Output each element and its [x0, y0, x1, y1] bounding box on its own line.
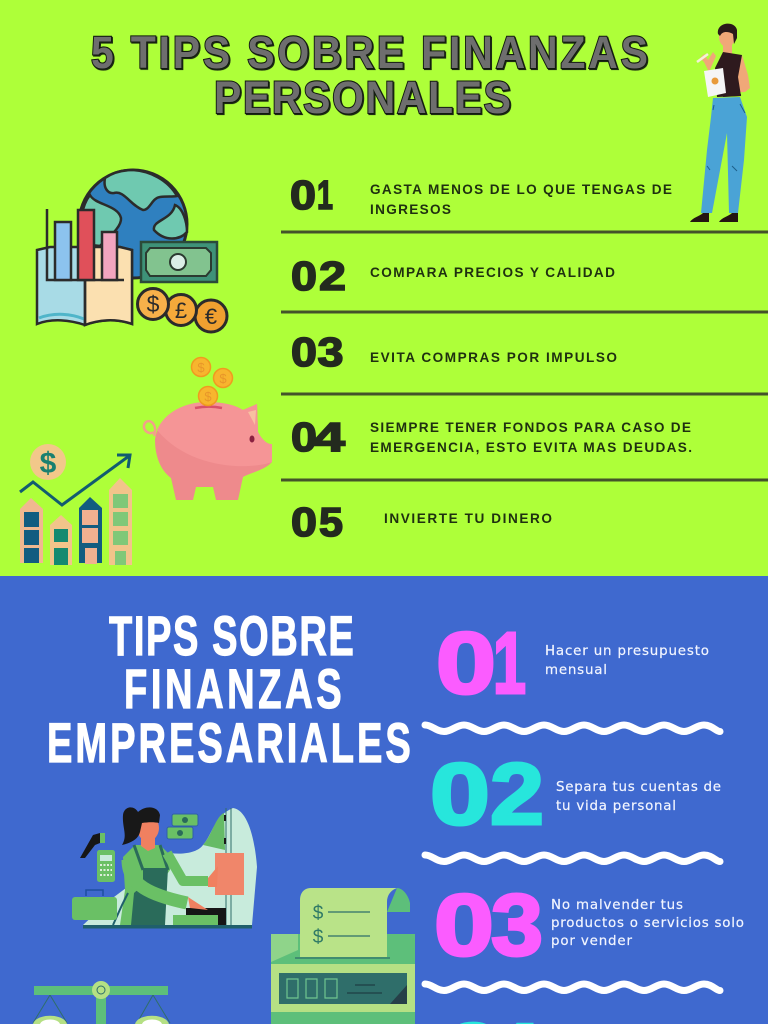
number 01: 0: [290, 172, 316, 218]
icon: rising buildings growth chart: [20, 444, 132, 565]
number 03: 3: [491, 877, 543, 974]
number 03: [434, 877, 543, 974]
icon: rising buildings growth chart: $: [40, 447, 57, 480]
title: business finance: [47, 606, 411, 775]
business tip 02: [430, 746, 721, 843]
number 01: 1: [493, 615, 526, 712]
number 01: [436, 615, 526, 712]
text 03: productos o servicios solo: [551, 916, 744, 931]
panel: personal finance background: [0, 0, 768, 576]
panel: business finance background: [0, 576, 768, 1024]
number 02: 0: [430, 746, 490, 843]
icon: piggy bank with coins: $: [204, 389, 212, 404]
text 02: COMPARA PRECIOS Y CALIDAD: [370, 265, 615, 280]
text 01: GASTA MENOS DE LO QUE TENGAS DE: [370, 182, 672, 197]
icon: piggy bank with coins: [144, 358, 272, 500]
icon: balance scale: [33, 981, 170, 1024]
tip row 04: [291, 414, 692, 460]
title: personal finance: 5 TIPS SOBRE FINANZAS: [91, 28, 648, 78]
text 04: EMERGENCIA, ESTO EVITA MAS DEUDAS.: [370, 440, 692, 455]
icon: shop cashier: [72, 807, 257, 928]
number 02: [430, 746, 544, 843]
tip row 03: [291, 329, 617, 375]
text 04: SIEMPRE TENER FONDOS PARA CASO DE: [370, 420, 691, 435]
title: business finance: EMPRESARIALES: [47, 713, 411, 775]
number 02: [291, 253, 346, 299]
text 02: [556, 780, 721, 814]
number 01: 0: [436, 615, 496, 712]
number 03: [291, 329, 344, 375]
text 01: Hacer un presupuesto: [545, 644, 709, 659]
text 05: INVIERTE TU DINERO: [384, 511, 552, 526]
icon: piggy bank with coins: $: [219, 371, 227, 386]
number 05: [291, 499, 343, 545]
number 02: 2: [490, 746, 544, 843]
number 04: 0: [291, 414, 317, 460]
title: business finance: FINANZAS: [124, 659, 342, 721]
title: business finance: TIPS SOBRE: [109, 606, 354, 668]
icon: globe, book chart, bill and coins: €: [205, 304, 217, 329]
title: personal finance: PERSONALES: [214, 73, 511, 123]
text 01: [370, 182, 672, 217]
business tip 01: [436, 615, 709, 712]
number 01: 1: [317, 172, 333, 218]
number 03: 0: [434, 877, 494, 974]
text 03: [551, 898, 744, 949]
icon: cash register with receipt: [271, 888, 415, 1024]
number 04: [291, 414, 345, 460]
text 01: mensual: [545, 663, 607, 678]
text 02: Separa tus cuentas de: [556, 780, 721, 795]
number 05: 5: [319, 499, 343, 545]
tip row 05: [291, 499, 552, 545]
number 02: 0: [291, 253, 317, 299]
icon: standing woman with tablet: [690, 24, 750, 222]
icon: cash register with receipt: $: [313, 927, 324, 948]
number 05: 0: [291, 499, 317, 545]
icon: globe, book chart, bill and coins: $: [147, 291, 160, 317]
business tip 04 number, cut off at page edge: [443, 1006, 541, 1024]
number 03: 3: [318, 329, 344, 375]
text 03: No malvender tus: [551, 898, 683, 913]
number 04: 4: [313, 414, 345, 460]
text 01: INGRESOS: [370, 202, 451, 217]
number 02: 2: [319, 253, 346, 299]
business tip 03: [434, 877, 744, 974]
icon: globe, book chart, bill and coins: £: [175, 298, 187, 323]
number 03: 0: [291, 329, 317, 375]
title: personal finance: [91, 28, 648, 123]
icon: cash register with receipt: $: [313, 903, 324, 924]
text 02: tu vida personal: [556, 799, 676, 814]
text 03: EVITA COMPRAS POR IMPULSO: [370, 350, 617, 365]
icon: piggy bank with coins: $: [197, 360, 205, 375]
text 03: por vender: [551, 934, 632, 949]
tip row 02: [291, 253, 615, 299]
number 01: [290, 172, 333, 218]
tip row 01: [290, 172, 672, 218]
text 04: [370, 420, 692, 455]
icon: globe, book chart, bill and coins: [37, 170, 227, 332]
text 01: [545, 644, 709, 678]
